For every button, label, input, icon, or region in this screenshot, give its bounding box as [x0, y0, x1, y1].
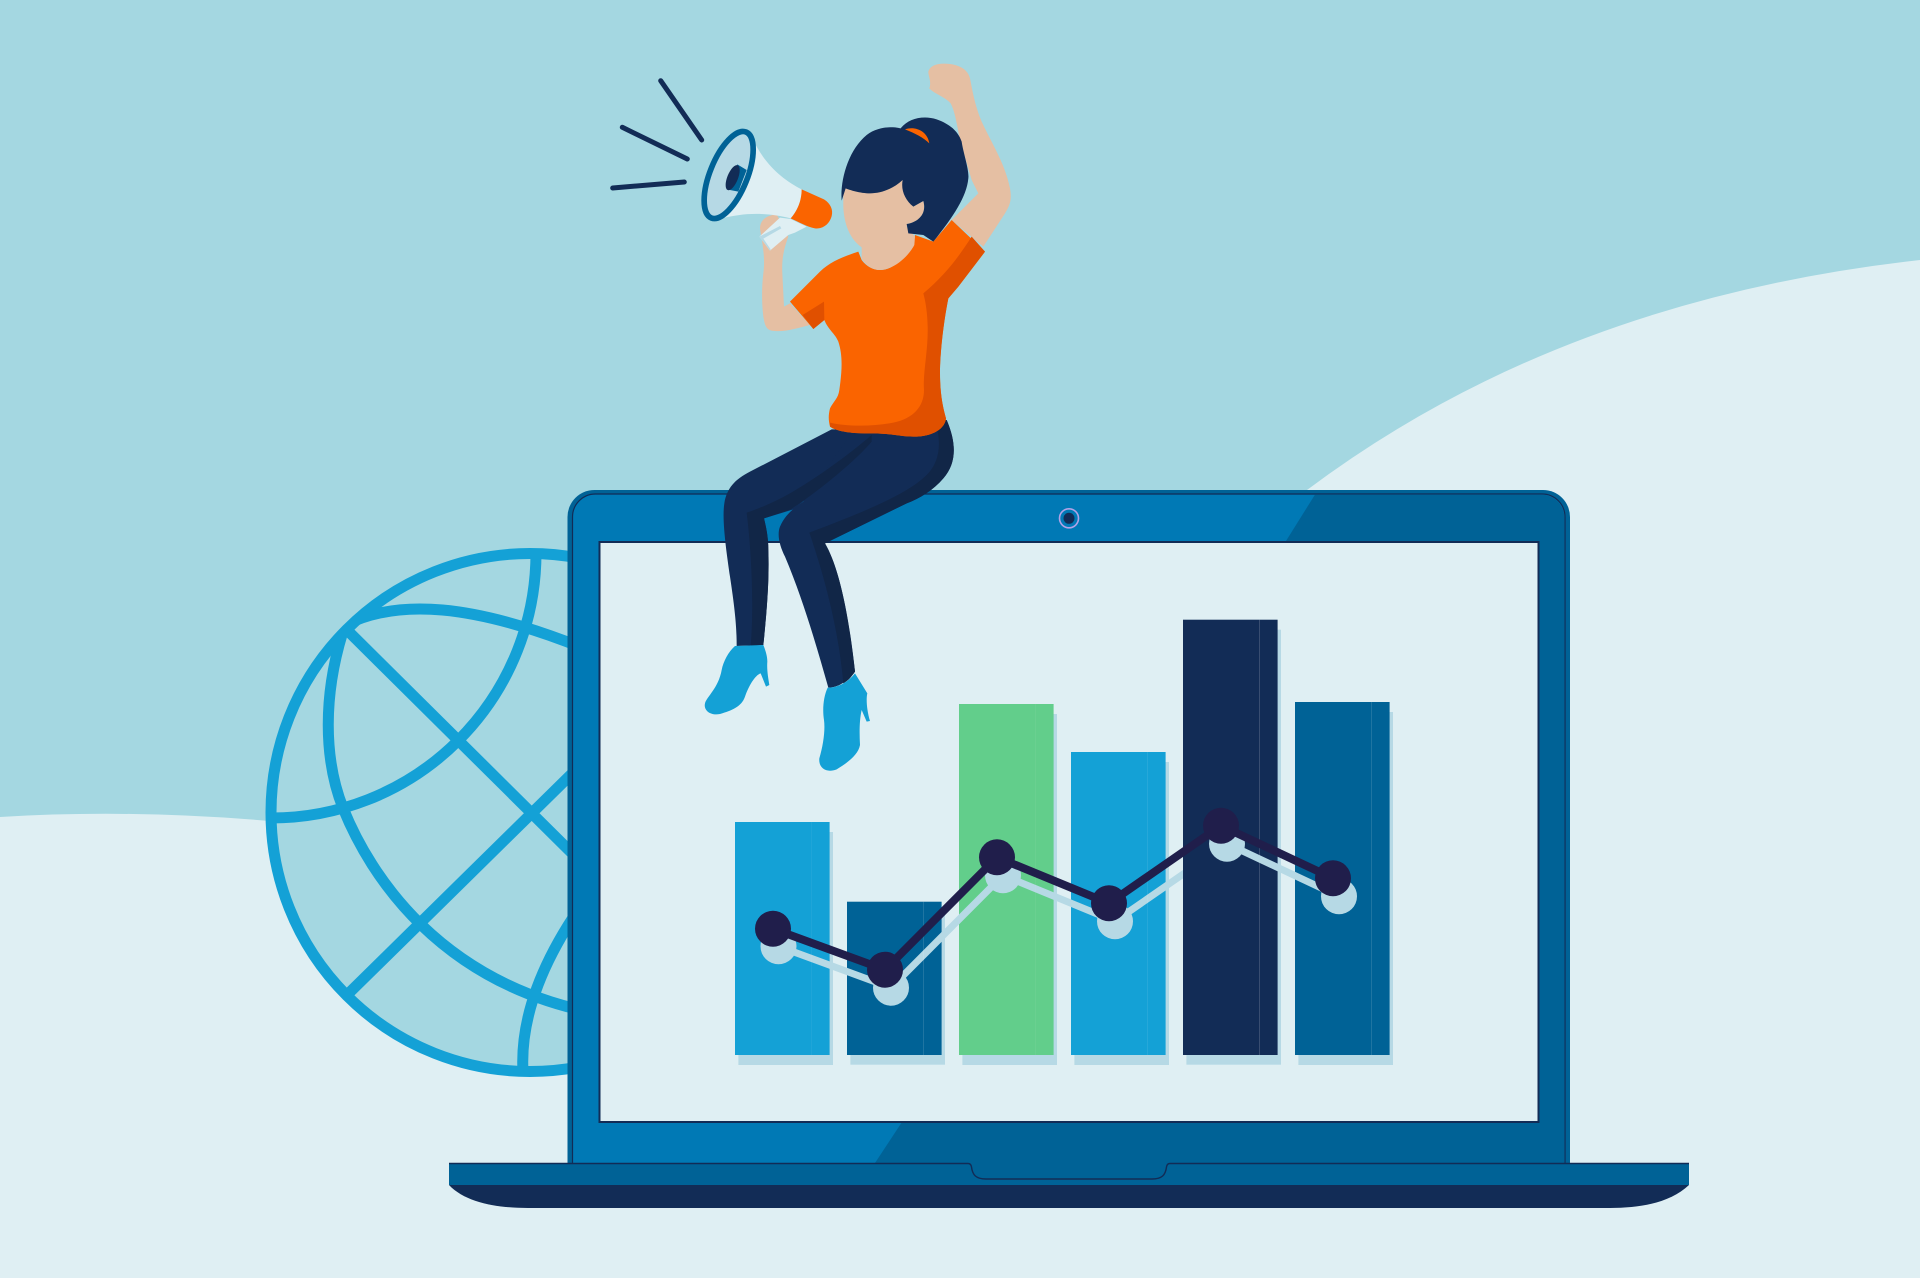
bar 1: [735, 822, 830, 1055]
ear: [907, 201, 924, 224]
megaphone driver cap: [723, 163, 743, 192]
megaphone handle: [759, 218, 807, 251]
megaphone handle edge: [759, 226, 781, 251]
shirt: [790, 220, 985, 437]
woman with megaphone: [613, 64, 1011, 771]
legs: [724, 420, 954, 688]
megaphone cone: [722, 140, 802, 218]
line series: [755, 808, 1351, 988]
bar separators: [812, 620, 1372, 1055]
shoes: [705, 645, 870, 771]
laptop base: [449, 1163, 1689, 1208]
icon: globe: [266, 548, 568, 1077]
bar shadows: [738, 630, 1393, 1065]
megaphone driver: [727, 164, 747, 192]
laptop: [449, 490, 1689, 1208]
bar 2: [847, 902, 942, 1055]
bar 3: [959, 704, 1054, 1055]
hair tie: [905, 128, 929, 143]
laptop screen: [600, 542, 1538, 1122]
laptop camera: [1060, 509, 1078, 528]
hair: [841, 117, 968, 242]
sound lines: [613, 81, 702, 188]
bar chart: [735, 620, 1393, 1065]
laptop lid: [568, 490, 1570, 1170]
face and neck: [843, 180, 915, 270]
line series shadow, left part: [778, 844, 1227, 988]
megaphone: [694, 125, 832, 251]
megaphone rim: [694, 125, 763, 225]
bar 6: [1295, 702, 1390, 1055]
line series shadow, dots: [760, 826, 1357, 1006]
bar 5: [1183, 620, 1278, 1055]
bar 4: [1071, 752, 1166, 1055]
arm holding megaphone: [760, 214, 810, 331]
megaphone end cap: [791, 189, 832, 228]
raised arm: [928, 64, 1011, 247]
